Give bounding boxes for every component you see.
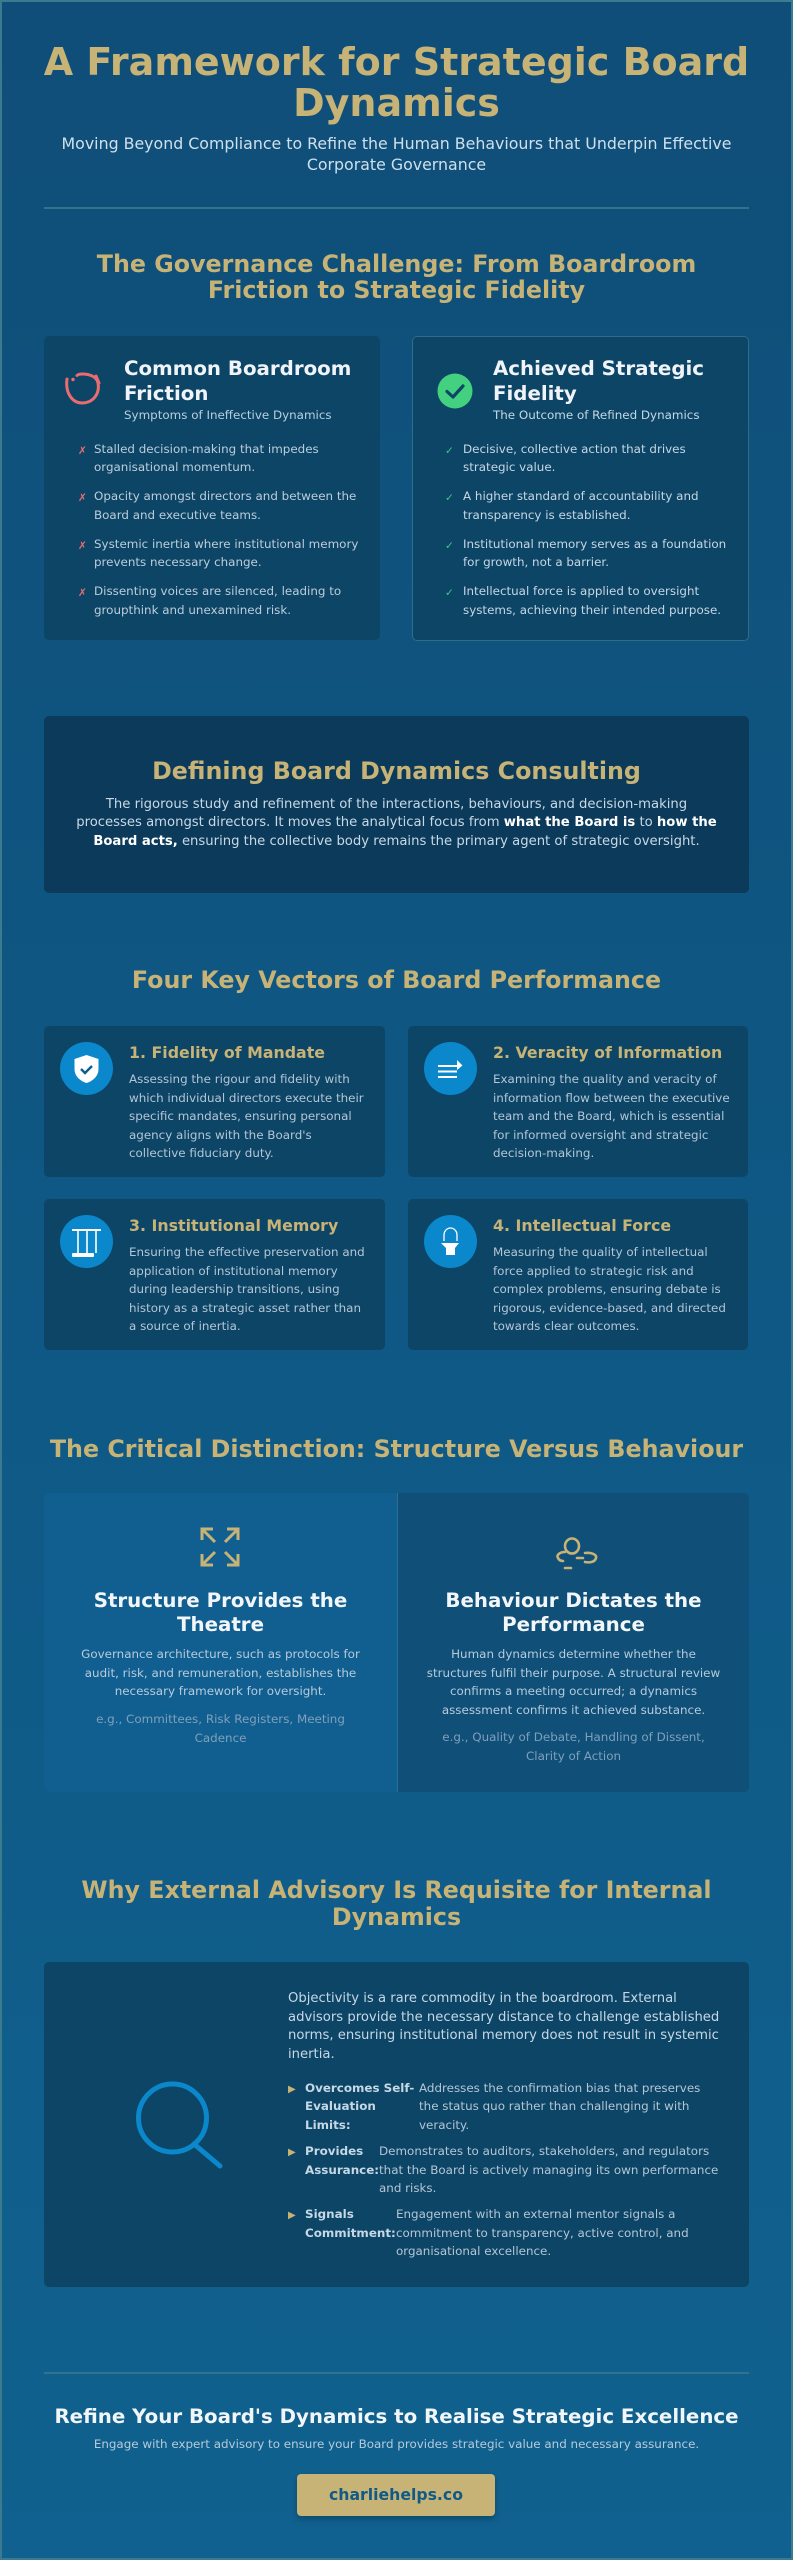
list item 1 bbox=[78, 442, 319, 474]
subtitle: Corporate Governance bbox=[307, 155, 486, 174]
panel: structure versus behaviour bbox=[44, 1493, 749, 1792]
card text: decision-making. bbox=[493, 1146, 594, 1160]
list item 4 bbox=[445, 584, 721, 617]
column text: Governance architecture, such as protocols for bbox=[81, 1647, 360, 1661]
bullet 3: organisational excellence. bbox=[396, 2244, 551, 2258]
card text: Assessing the rigour and fidelity with bbox=[129, 1072, 350, 1086]
list item 3: Systemic inertia where institutional memory bbox=[94, 536, 358, 550]
intro text: advisors provide the necessary distance to challenge established bbox=[288, 2010, 719, 2024]
heading: governance challenge bbox=[96, 250, 696, 304]
panel subheading: The Outcome of Refined Dynamics bbox=[493, 408, 700, 422]
card text: information flow between the executive bbox=[493, 1090, 730, 1104]
column heading bbox=[445, 1589, 702, 1636]
bullet 1: veracity. bbox=[419, 2118, 469, 2132]
list item 1: ✓ bbox=[445, 444, 454, 456]
heading: governance challenge: The Governance Challenge: From Boardroom bbox=[97, 250, 696, 278]
list item 1: ✗ bbox=[78, 444, 87, 456]
vector card 1 bbox=[44, 1026, 385, 1177]
bullet 3: Signals bbox=[305, 2207, 354, 2221]
panel heading: Friction bbox=[124, 382, 208, 404]
list item 2: Opacity amongst directors and between the bbox=[94, 489, 356, 503]
panel heading: Achieved Strategic bbox=[493, 357, 704, 380]
call to action heading: Refine Your Board's Dynamics to Realise Strategic Excellence bbox=[54, 2405, 739, 2428]
bullet 2: Provides bbox=[305, 2144, 363, 2158]
card text: force applied to strategic risk and bbox=[493, 1264, 694, 1278]
column example: e.g., Quality of Debate, Handling of Dissent, bbox=[442, 1730, 705, 1744]
column text: Human dynamics determine whether the bbox=[451, 1647, 696, 1661]
bullet 2: ▶ bbox=[288, 2147, 296, 2158]
card text bbox=[129, 1072, 364, 1160]
intro text: Objectivity is a rare commodity in the boardroom. External bbox=[288, 1991, 677, 2006]
column text: necessary framework for oversight. bbox=[115, 1684, 326, 1698]
panel heading: Defining Board Dynamics Consulting bbox=[152, 757, 641, 785]
column: behaviour bbox=[427, 1537, 720, 1762]
bullet 2: and risks. bbox=[379, 2181, 436, 2195]
list item 4: ✗ bbox=[78, 587, 87, 599]
card text: application of institutional memory bbox=[129, 1264, 338, 1278]
column example: Cadence bbox=[195, 1730, 246, 1744]
card text: for informed oversight and strategic bbox=[493, 1128, 708, 1142]
panel: common boardroom friction bbox=[44, 336, 380, 640]
column text: structures fulfil their purpose. A structural review bbox=[427, 1666, 720, 1680]
icon: dynamics bbox=[556, 1537, 598, 1570]
panel: defining board dynamics consulting bbox=[44, 716, 749, 893]
column heading: Performance bbox=[502, 1613, 645, 1636]
panel body: The rigorous study and refinement of the interactions, behaviours, and decision-making bbox=[106, 796, 687, 812]
button bbox=[297, 2474, 495, 2516]
column example: Clarity of Action bbox=[526, 1748, 621, 1762]
icon: expand arrows bbox=[200, 1528, 240, 1566]
intro text: inertia. bbox=[288, 2046, 335, 2062]
panel subheading: Symptoms of Ineffective Dynamics bbox=[124, 408, 332, 422]
vector card 4 bbox=[408, 1199, 748, 1350]
title: A Framework for Strategic Board bbox=[44, 40, 749, 84]
panel heading bbox=[124, 357, 351, 404]
list item 3: ✓ bbox=[445, 540, 454, 552]
card title: 2. Veracity of Information bbox=[493, 1043, 722, 1062]
column heading bbox=[94, 1589, 347, 1636]
list item 4 bbox=[78, 584, 341, 617]
bullet 3 bbox=[288, 2207, 689, 2258]
list item 2: ✗ bbox=[78, 492, 87, 504]
card text: which individual directors execute their bbox=[129, 1090, 364, 1104]
bullet 2: Assurance: bbox=[305, 2162, 379, 2176]
column text: audit, risk, and remuneration, establishes the bbox=[85, 1666, 356, 1680]
bullet 3: Commitment: bbox=[305, 2226, 396, 2240]
list item 1: organisational momentum. bbox=[94, 460, 255, 474]
card text: complex problems, ensuring debate is bbox=[493, 1282, 721, 1296]
list item 4: Intellectual force is applied to oversight bbox=[463, 584, 699, 598]
bullet 2: Demonstrates to auditors, stakeholders, and regulators bbox=[379, 2144, 709, 2158]
card text: Examining the quality and veracity of bbox=[493, 1072, 717, 1086]
heading: four key vectors: Four Key Vectors of Board Performance bbox=[132, 966, 661, 994]
panel: external advisory bbox=[44, 1962, 749, 2287]
list item 2: A higher standard of accountability and bbox=[463, 489, 699, 503]
card text: during leadership transitions, using bbox=[129, 1282, 340, 1296]
title bbox=[44, 40, 749, 125]
heading: external advisory bbox=[81, 1876, 712, 1931]
bullet 1: Limits: bbox=[305, 2118, 351, 2132]
column text bbox=[81, 1647, 360, 1698]
list item 4: ✓ bbox=[445, 587, 454, 599]
list item 1 bbox=[445, 442, 686, 474]
panel heading bbox=[493, 357, 704, 404]
icon: shield bbox=[60, 1042, 113, 1095]
icon: magnifying glass bbox=[136, 2082, 222, 2168]
icon: lamp bbox=[424, 1215, 477, 1268]
heading: external advisory: Why External Advisory Is Requisite for Internal bbox=[81, 1876, 712, 1904]
title: Dynamics bbox=[293, 81, 500, 125]
vector card 3 bbox=[44, 1199, 385, 1350]
bullet 1: ▶ bbox=[288, 2084, 296, 2094]
panel: achieved strategic fidelity bbox=[412, 336, 749, 641]
column heading: Behaviour Dictates the bbox=[445, 1589, 702, 1612]
card title: 3. Institutional Memory bbox=[129, 1216, 338, 1235]
list item 3: Institutional memory serves as a foundation bbox=[463, 536, 726, 550]
panel body bbox=[76, 796, 717, 848]
card title: 4. Intellectual Force bbox=[493, 1216, 671, 1235]
column text bbox=[427, 1647, 720, 1716]
subtitle: Moving Beyond Compliance to Refine the Human Behaviours that Underpin Effective bbox=[62, 134, 731, 153]
card text: rigorous, evidence-based, and directed bbox=[493, 1300, 726, 1314]
card text: Measuring the quality of intellectual bbox=[493, 1245, 708, 1259]
card text: team and the Board, which is essential bbox=[493, 1109, 724, 1123]
bullet 2: that the Board is actively managing its own performance bbox=[379, 2162, 718, 2176]
card text: specific mandates, ensuring personal bbox=[129, 1109, 352, 1123]
list item 3: prevents necessary change. bbox=[94, 555, 262, 569]
bullet 3: ▶ bbox=[288, 2210, 296, 2221]
list item 2: Board and executive teams. bbox=[94, 508, 261, 522]
subtitle bbox=[62, 134, 731, 174]
panel heading: Fidelity bbox=[493, 382, 577, 404]
column text: assessment confirms it achieved substance. bbox=[442, 1702, 705, 1716]
list item 3: for growth, not a barrier. bbox=[463, 555, 609, 569]
icon: friction ring bbox=[65, 372, 100, 404]
list item 2: transparency is established. bbox=[463, 508, 631, 522]
card text: Ensuring the effective preservation and bbox=[129, 1245, 365, 1259]
list item 3 bbox=[78, 536, 358, 569]
list item 1: strategic value. bbox=[463, 460, 555, 474]
panel body: processes amongst directors. It moves the analytical focus from what the Board is to how the bbox=[76, 815, 717, 830]
icon: information flow bbox=[424, 1042, 477, 1095]
list item 1: Stalled decision-making that impedes bbox=[94, 442, 319, 456]
bullet 3: Engagement with an external mentor signals a bbox=[396, 2207, 675, 2221]
card text: a source of inertia. bbox=[129, 1319, 241, 1333]
panel body: Board acts, ensuring the collective body remains the primary agent of strategic oversight. bbox=[93, 834, 700, 848]
intro text bbox=[288, 1991, 719, 2062]
card text bbox=[129, 1245, 365, 1333]
column example: e.g., Committees, Risk Registers, Meeting bbox=[96, 1712, 345, 1726]
bullet 1: Overcomes Self- bbox=[305, 2080, 414, 2094]
column heading: Structure Provides the bbox=[94, 1589, 347, 1612]
list item 3: ✗ bbox=[78, 540, 87, 552]
vector card 2 bbox=[408, 1026, 748, 1177]
icon: green check bbox=[438, 374, 472, 408]
list item 3 bbox=[445, 536, 726, 569]
bullet 2 bbox=[288, 2144, 718, 2195]
heading: governance challenge: Friction to Strategic Fidelity bbox=[208, 276, 585, 304]
card text bbox=[493, 1072, 730, 1160]
bullet 1: Addresses the confirmation bias that preserves bbox=[419, 2080, 700, 2094]
column: structure bbox=[44, 1493, 398, 1792]
list item 4: Dissenting voices are silenced, leading to bbox=[94, 584, 341, 598]
list item 1: Decisive, collective action that drives bbox=[463, 442, 686, 456]
card text: agency aligns with the Board's bbox=[129, 1128, 312, 1142]
bullet 1: Evaluation bbox=[305, 2099, 376, 2113]
card title: 1. Fidelity of Mandate bbox=[129, 1043, 325, 1062]
card text bbox=[493, 1245, 726, 1333]
icon: pillars bbox=[60, 1215, 113, 1268]
list item 4: systems, achieving their intended purpose. bbox=[463, 603, 721, 617]
heading: external advisory: Dynamics bbox=[332, 1903, 461, 1931]
list item 2 bbox=[78, 489, 356, 522]
panel heading: Common Boardroom bbox=[124, 357, 351, 380]
card text: collective fiduciary duty. bbox=[129, 1146, 274, 1160]
bullet 1: the status quo rather than challenging it with bbox=[419, 2099, 689, 2113]
list item 4: groupthink and unexamined risk. bbox=[94, 603, 291, 617]
card text: towards clear outcomes. bbox=[493, 1319, 639, 1333]
list item 2 bbox=[445, 489, 699, 522]
button: charliehelps.co bbox=[329, 2485, 463, 2504]
column text: confirms a meeting occurred; a dynamics bbox=[450, 1684, 697, 1698]
bullet 3: commitment to transparency, active control, and bbox=[396, 2226, 689, 2240]
column example bbox=[96, 1712, 345, 1744]
call to action text: Engage with expert advisory to ensure your Board provides strategic value and necessary assurance. bbox=[94, 2437, 699, 2451]
column heading: Theatre bbox=[177, 1613, 264, 1636]
column example bbox=[442, 1730, 705, 1762]
list item 2: ✓ bbox=[445, 492, 454, 504]
heading: critical distinction: The Critical Distinction: Structure Versus Behaviour bbox=[50, 1435, 743, 1463]
intro text: norms, ensuring institutional memory does not result in systemic bbox=[288, 2028, 719, 2043]
card text: history as a strategic asset rather than bbox=[129, 1300, 361, 1314]
bullet 1 bbox=[288, 2080, 700, 2132]
